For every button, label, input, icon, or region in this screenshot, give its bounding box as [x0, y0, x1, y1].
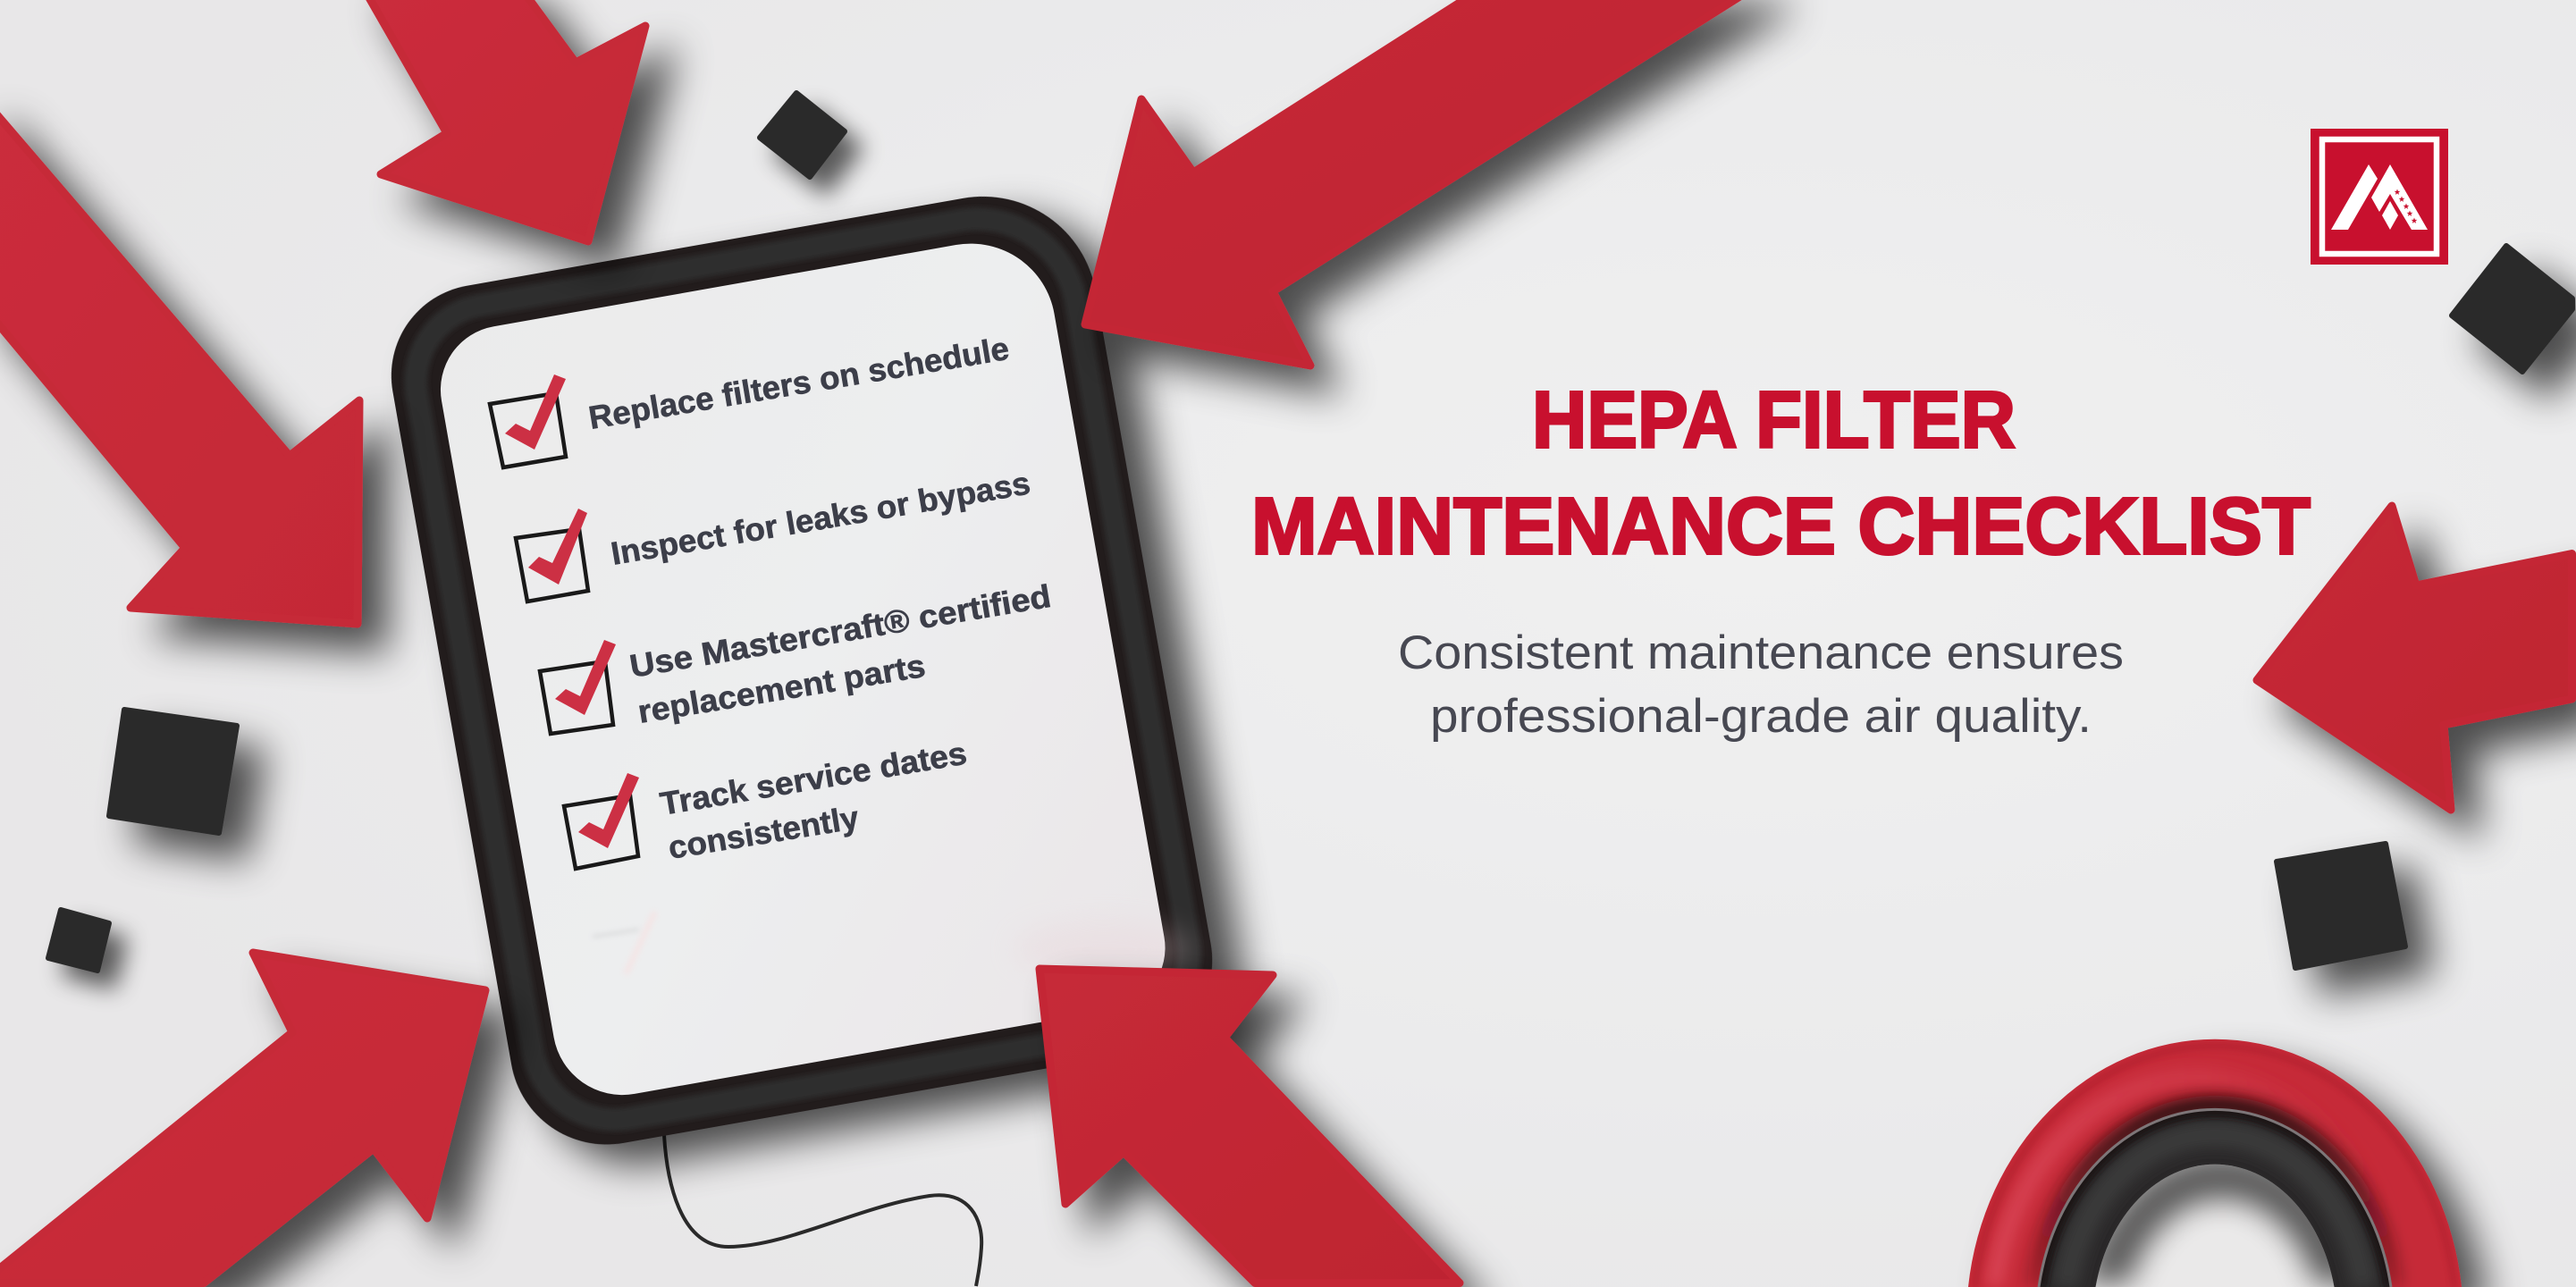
title: HEPA FILTER — [1532, 375, 2016, 465]
checklist item 2: Inspect for leaks or bypass — [608, 464, 1033, 572]
pink reflection near arrow — [1014, 922, 1193, 976]
subtitle text — [1398, 627, 2124, 743]
cube: top centre — [760, 93, 845, 177]
ring centre hole — [2095, 1164, 2335, 1287]
faint erased checkbox mark — [593, 912, 655, 974]
checklist item 2 — [516, 464, 1033, 601]
subtitle text: professional-grade air quality. — [1430, 690, 2092, 743]
cube: top right — [2452, 246, 2572, 372]
checklist item 4 — [564, 735, 969, 869]
checklist item 1 — [490, 330, 1012, 467]
ring inner black band — [2039, 1109, 2391, 1287]
cube: lower right — [2277, 844, 2405, 968]
logo mountain mark — [2331, 164, 2428, 230]
panel: checklist tablet — [377, 179, 1227, 1160]
arrow: right side — [2257, 506, 2572, 810]
logo: Mastercraft badge — [2311, 129, 2448, 265]
cube: left small — [48, 910, 109, 971]
title — [1251, 375, 2311, 572]
checklist item 3: Use Mastercraft® certified — [627, 577, 1054, 685]
arrow: top right — [1085, 0, 1763, 366]
arrow: top centre-left — [360, 0, 645, 241]
tablet frame — [377, 179, 1227, 1160]
logo stars — [2395, 189, 2417, 223]
checklist item 3: replacement parts — [636, 647, 928, 730]
checklist item 4: Track service dates — [657, 735, 969, 822]
arrow: bottom centre — [1040, 969, 1460, 1283]
ring outer red band — [1968, 1039, 2462, 1287]
cube: left large — [109, 710, 237, 833]
cable from tablet — [664, 1135, 981, 1286]
arrow: lower left — [0, 953, 485, 1283]
ring: red and black torus — [1968, 1039, 2462, 1287]
arrow: upper left — [0, 97, 359, 624]
subtitle text: Consistent maintenance ensures — [1398, 627, 2124, 679]
checklist item 4: consistently — [666, 799, 861, 866]
title: MAINTENANCE CHECKLIST — [1251, 483, 2311, 572]
checklist item 3 — [540, 577, 1054, 734]
checklist item 1: Replace filters on schedule — [586, 330, 1012, 436]
